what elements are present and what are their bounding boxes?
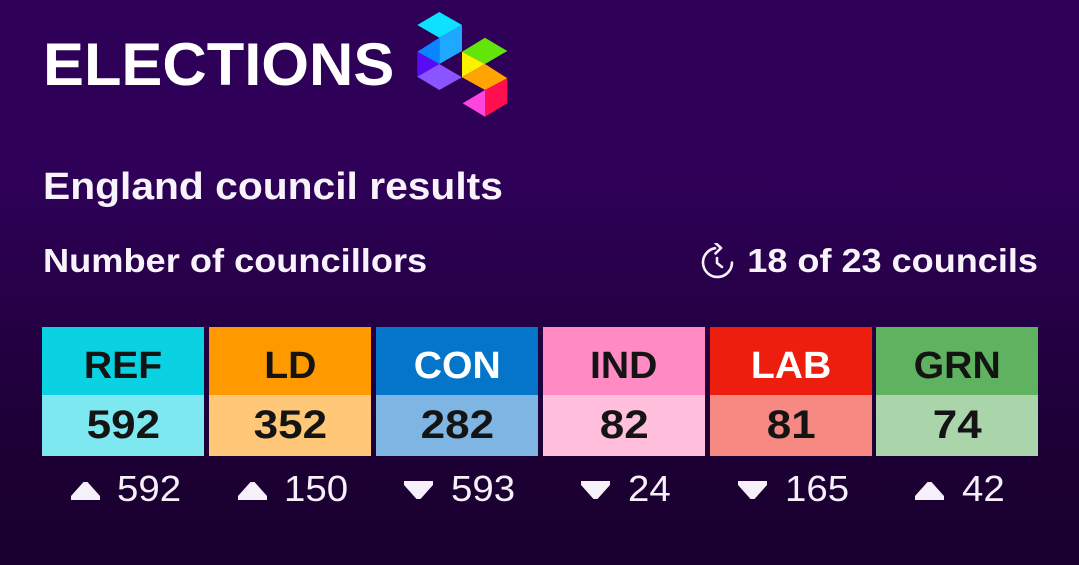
party card: IND [543, 327, 705, 456]
change: LD up 150: 150 [284, 468, 348, 509]
party card: REF: REF [84, 345, 162, 387]
change: CON down 593: 593 [451, 468, 515, 509]
party card: CON: 282 [420, 403, 494, 447]
party card: IND: 82 [600, 403, 648, 447]
change: REF up 592: 592 [117, 468, 181, 509]
party card: LD: LD [264, 345, 316, 387]
party card: REF: 592 [86, 403, 160, 447]
party card: GRN: GRN [913, 345, 1000, 387]
change: LAB down 165: 165 [785, 468, 849, 509]
change: REF up 592 [71, 468, 181, 509]
party card: GRN: 74 [933, 403, 981, 447]
icon: clock [702, 243, 734, 278]
status: councils declared [702, 242, 1038, 279]
title: ELECTIONS: ELECTIONS [43, 31, 394, 98]
party card: LAB: 81 [767, 403, 815, 447]
party card: IND: IND [590, 345, 658, 387]
change: LAB down 165 [738, 468, 849, 509]
party card: CON [376, 327, 538, 456]
subheading: Number of councillors: Number of councillors [43, 242, 427, 279]
party card: LD: 352 [253, 403, 327, 447]
party card: CON: CON [413, 345, 500, 387]
change: GRN up 42 [915, 468, 1005, 509]
party card: GRN [876, 327, 1038, 456]
change: LD up 150 [238, 468, 348, 509]
heading: England council results: England council results [43, 166, 503, 208]
party card: REF [42, 327, 204, 456]
change: CON down 593 [404, 468, 515, 509]
party card: LD [209, 327, 371, 456]
party card: LAB [710, 327, 872, 456]
change: GRN up 42: 42 [962, 468, 1005, 509]
party card: LAB: LAB [751, 345, 831, 387]
change: IND down 24 [581, 468, 671, 509]
icon: elections logo [417, 12, 508, 117]
change: IND down 24: 24 [628, 468, 671, 509]
text: 18 of 23 councils: 18 of 23 councils [747, 242, 1038, 279]
